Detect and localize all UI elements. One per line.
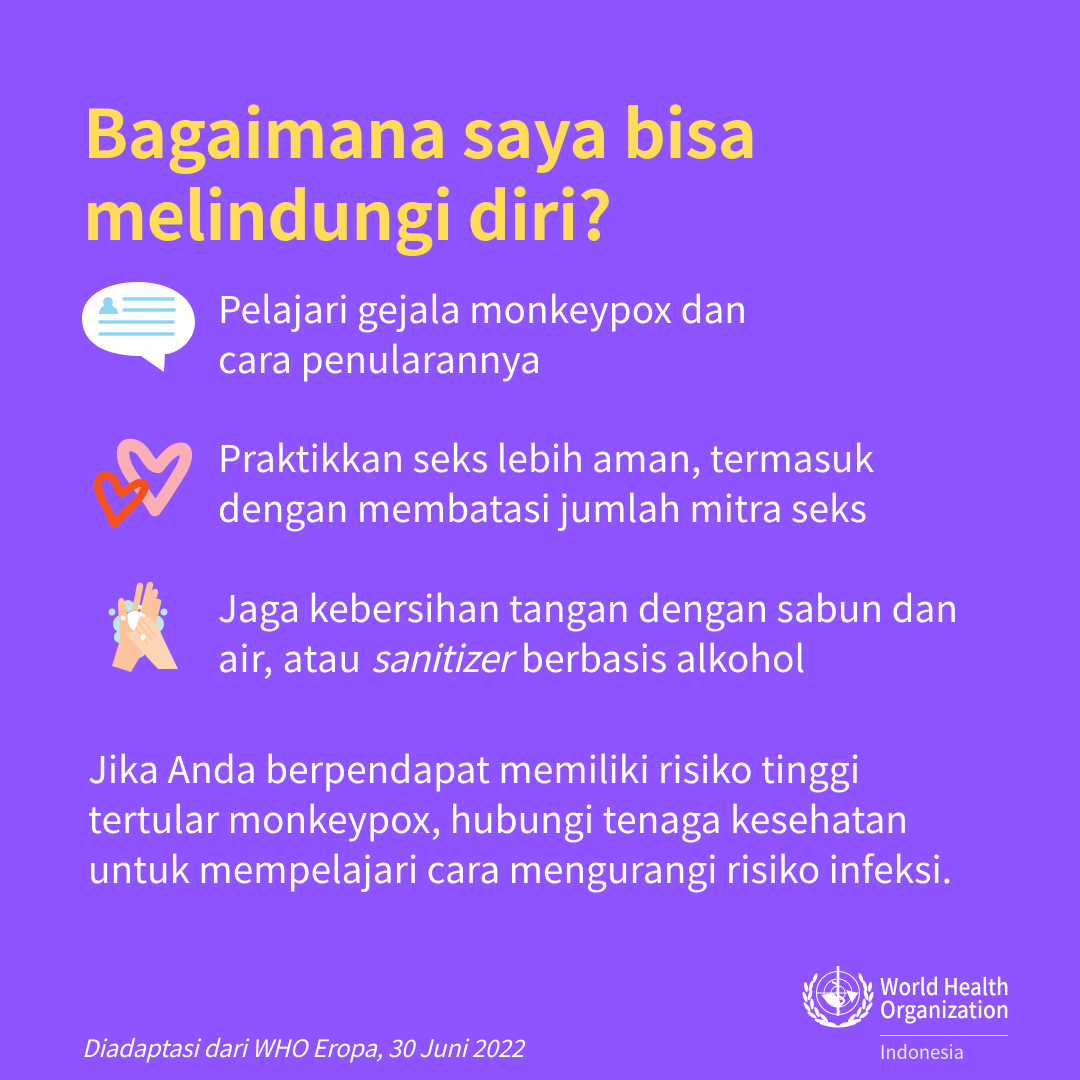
icon: washing hands xyxy=(108,585,178,672)
title xyxy=(83,82,757,260)
text: hand hygiene: Jaga kebersihan tangan dengan sabun dan xyxy=(218,579,958,633)
text: learn symptoms: cara penularannya xyxy=(218,330,541,384)
title: Bagaimana saya bisa xyxy=(83,82,757,178)
icon: two hearts xyxy=(98,445,186,524)
icon: speech bubble xyxy=(82,282,195,372)
text: closing advice xyxy=(88,740,952,894)
text: learn symptoms: Pelajari gejala monkeypox dan xyxy=(218,280,747,334)
text: safer sex xyxy=(218,429,875,533)
WHO logo: Organization xyxy=(880,991,1009,1025)
footer source: Diadaptasi dari WHO Eropa, 30 Juni 2022 xyxy=(82,1029,527,1064)
text: hand hygiene: air, atau xyxy=(218,629,361,683)
WHO logo xyxy=(801,966,1009,1065)
text: learn symptoms xyxy=(218,280,747,384)
text: hand hygiene: berbasis alkohol xyxy=(521,629,805,683)
text: closing advice: tertular monkeypox, hubungi tenaga kesehatan xyxy=(88,790,908,844)
title: melindungi diri? xyxy=(83,164,612,260)
text: safer sex: dengan membatasi jumlah mitra seks xyxy=(218,479,867,533)
text: hand hygiene xyxy=(218,579,958,683)
WHO logo: Indonesia xyxy=(880,1038,964,1065)
text: hand hygiene: sanitizer xyxy=(371,629,518,683)
text: closing advice: untuk mempelajari cara mengurangi risiko infeksi. xyxy=(88,840,952,894)
text: closing advice: Jika Anda berpendapat memiliki risiko tinggi xyxy=(88,740,860,794)
WHO logo: World Health xyxy=(880,968,1009,1002)
text: safer sex: Praktikkan seks lebih aman, termasuk xyxy=(218,429,875,483)
